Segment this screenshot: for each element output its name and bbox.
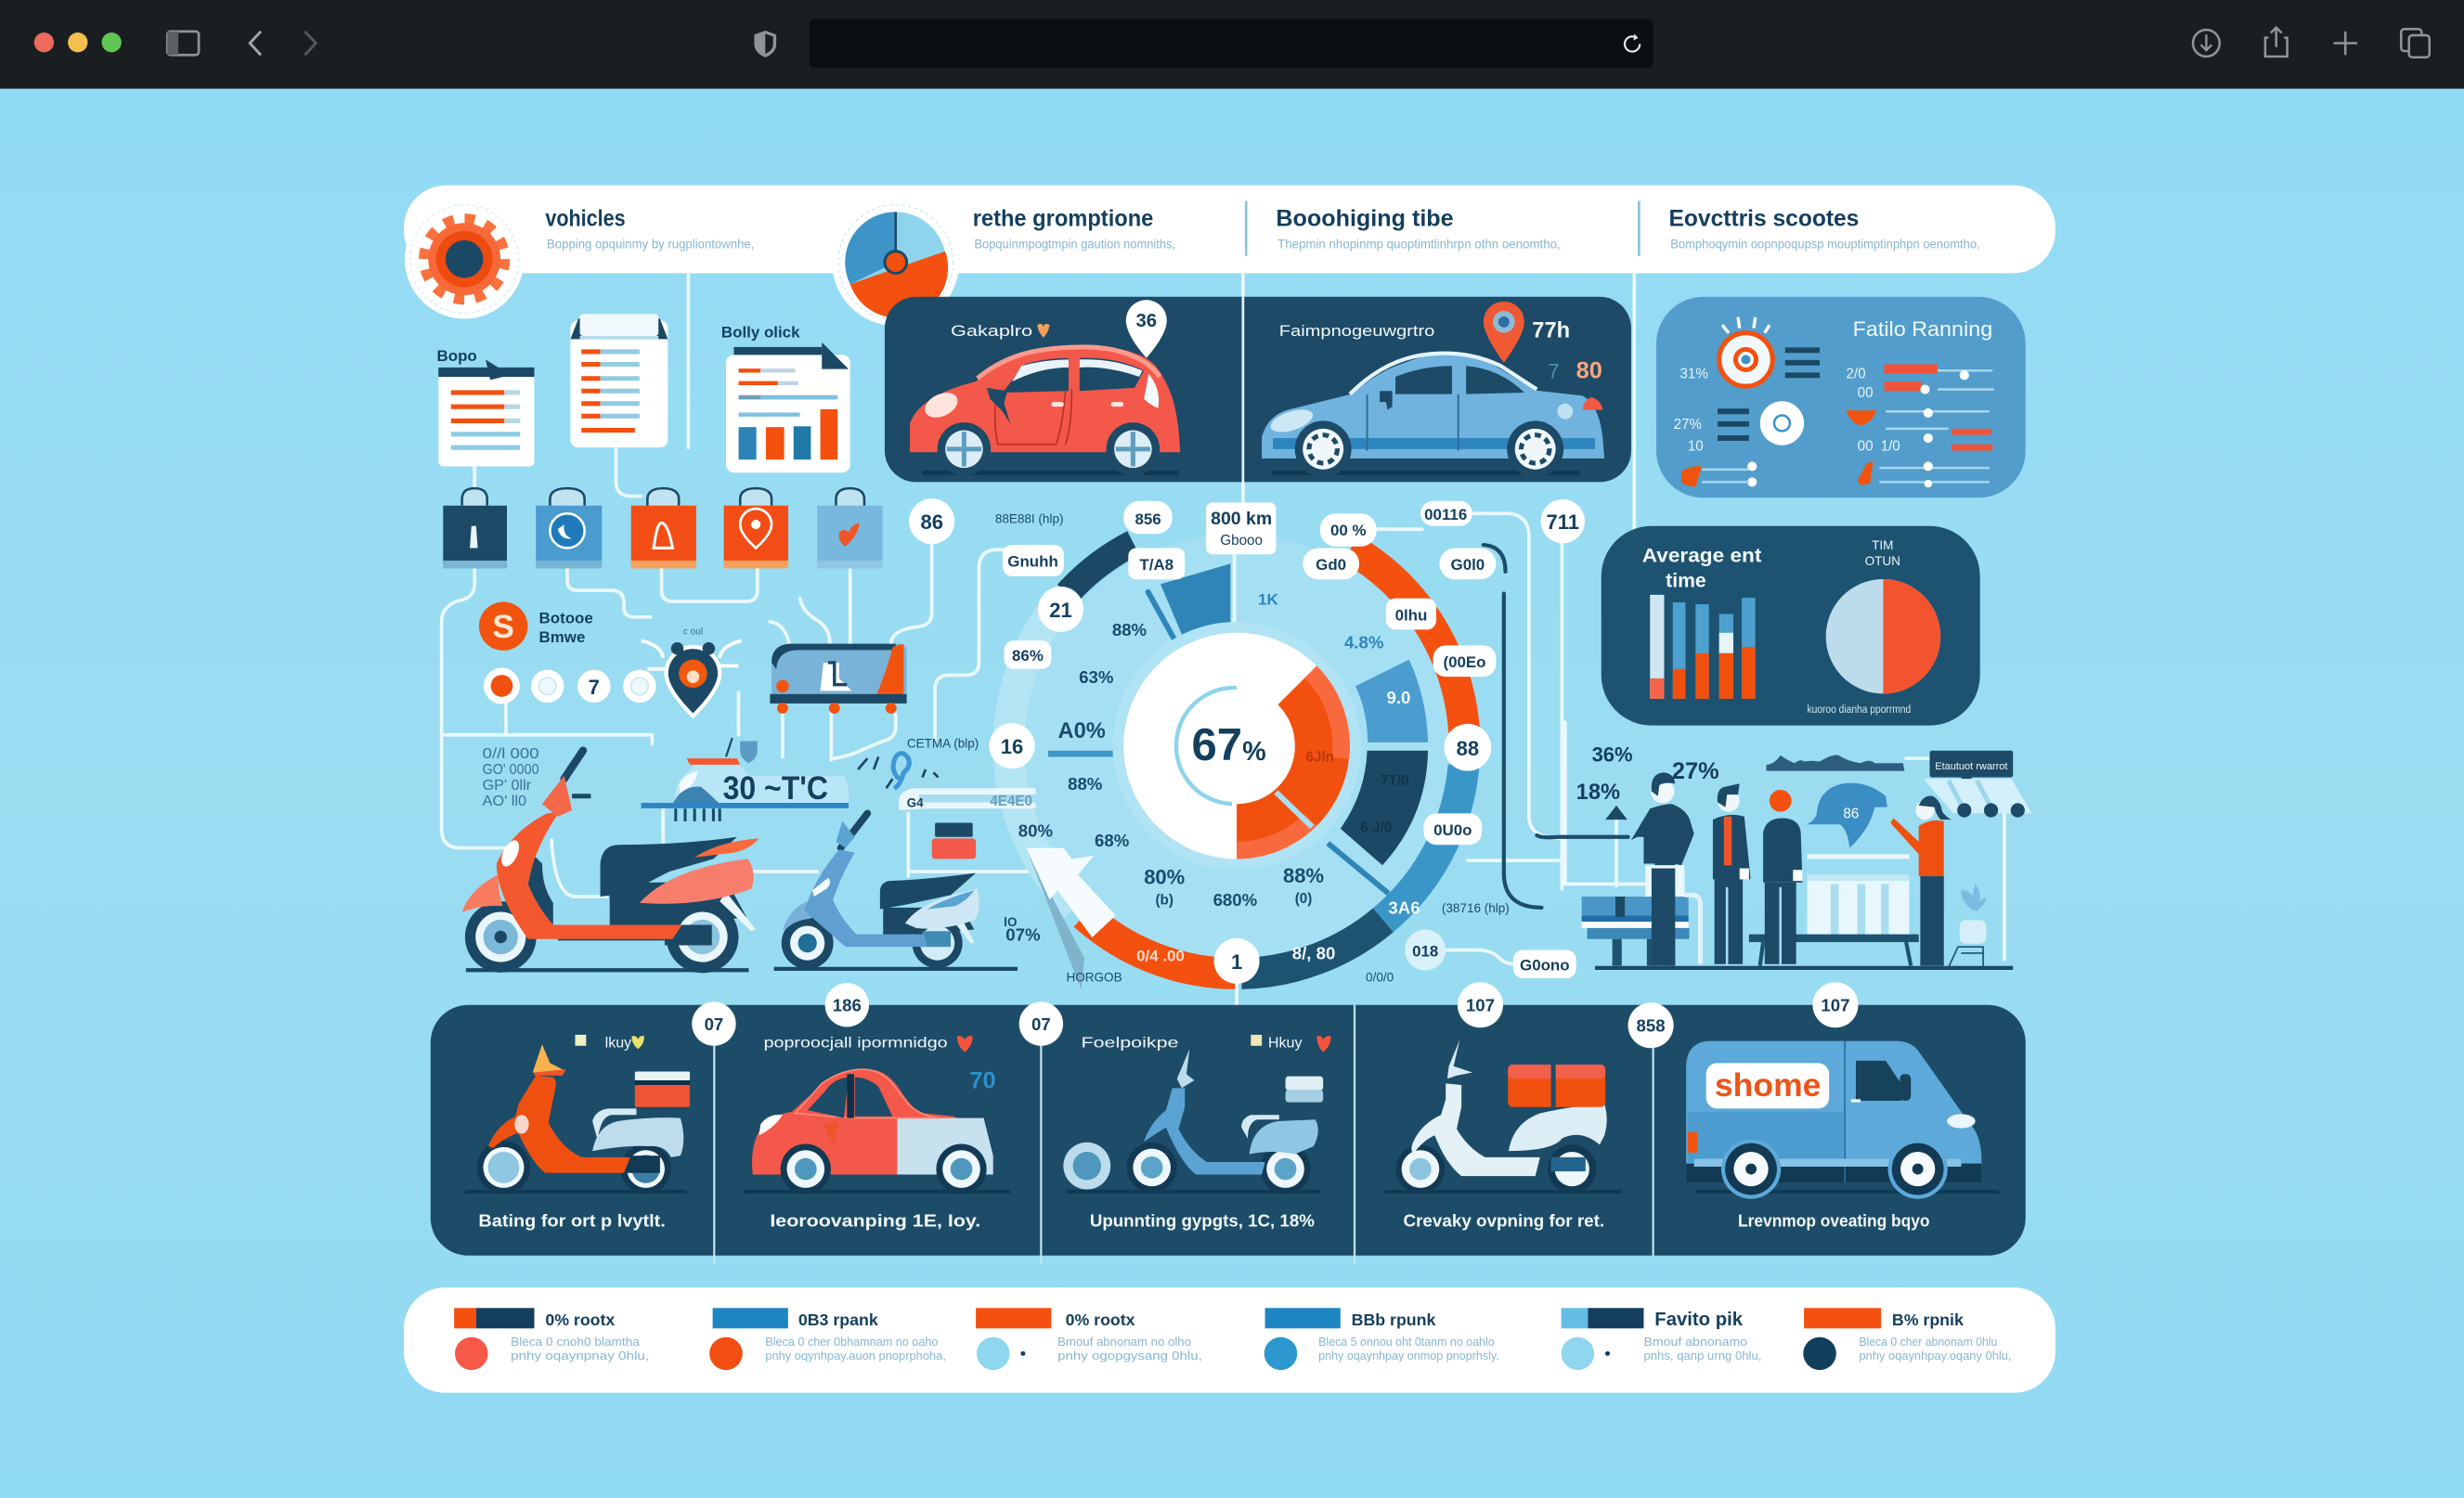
heading: vehicles: vohicles xyxy=(545,207,626,232)
legend item 3: pnhy ogopgysang 0hlu, xyxy=(1057,1349,1202,1362)
person 1 xyxy=(1631,772,1694,965)
donut percentage labels: 68% xyxy=(1095,831,1130,850)
bench left xyxy=(1582,895,1700,965)
bag: orange bell xyxy=(631,488,696,568)
node 86 xyxy=(909,498,954,544)
white center xyxy=(1123,633,1350,859)
document 1: Bopo xyxy=(437,347,477,365)
percent labels: 18% xyxy=(1576,781,1620,805)
donut percentage labels: 8/, 80 xyxy=(1292,944,1335,963)
red top box xyxy=(932,823,976,859)
speech bubble xyxy=(1807,783,1887,848)
document 3 chart page: Bolly olick xyxy=(721,324,800,342)
node 107 second xyxy=(1812,982,1859,1027)
blue scooter card: Upunnting gypgts, 1C, 18% xyxy=(1090,1210,1315,1230)
legend item 6: Bleca 0 cher abnonam 0hlu xyxy=(1859,1336,1997,1349)
average time panel xyxy=(1602,526,1980,726)
heading: electric scooters xyxy=(1669,207,1980,251)
legend item 1: 0% rootx xyxy=(545,1311,615,1329)
panel title xyxy=(1642,546,1761,592)
bag: dark xyxy=(443,488,507,568)
car card: 70 xyxy=(969,1067,996,1093)
left note box text: GO' 0000 xyxy=(483,762,539,778)
pill 86 percent: 86% xyxy=(1012,647,1044,665)
legend item 3: Bmouf abnonam no olho xyxy=(1057,1336,1191,1349)
pill 018 xyxy=(1405,930,1446,971)
ground xyxy=(466,969,749,971)
speech bubble: 86 xyxy=(1843,806,1859,821)
dark sector xyxy=(1341,751,1428,865)
legend item 5: Bmouf abnonamo xyxy=(1643,1336,1747,1349)
bottom vehicle panel xyxy=(431,982,2026,1264)
legend item 6: pnhy oqaynhpay.oqany 0hlu, xyxy=(1859,1349,2012,1362)
icon: location pin with rays: c oul xyxy=(683,626,703,637)
sliders xyxy=(1681,365,1994,487)
pill 800 km: Gbooo xyxy=(1220,533,1263,549)
blue car label: Faimpnogeuwgrtro xyxy=(1279,322,1434,340)
left note box text xyxy=(483,746,539,809)
status dots: 7 xyxy=(589,676,600,699)
node 85: 858 xyxy=(1637,1016,1666,1036)
plant xyxy=(1949,884,1986,967)
pill G0 l0: G0l0 xyxy=(1451,556,1485,574)
rear shell xyxy=(640,859,754,904)
node 186: 186 xyxy=(833,996,862,1015)
donut callout pills xyxy=(899,501,1576,978)
gauge icon xyxy=(1719,317,1772,386)
blue car xyxy=(1262,354,1604,477)
left note box text: 0//l 000 xyxy=(483,746,539,762)
wheels xyxy=(465,901,537,973)
shopping bags xyxy=(443,488,883,568)
small values: 00 xyxy=(1858,385,1874,401)
display stand xyxy=(1749,854,1919,965)
pill 0lhu xyxy=(1386,599,1436,629)
body xyxy=(528,856,553,924)
donut percentage labels: 0/0/0 xyxy=(1366,970,1394,984)
document 3 chart page xyxy=(721,324,850,472)
value 80 xyxy=(1548,358,1602,384)
icon: vehicle seat xyxy=(770,644,907,714)
heading: promotions: rethe gromptione xyxy=(973,207,1153,232)
blue scooter xyxy=(774,813,1018,969)
pill T/A8: T/A8 xyxy=(1139,556,1174,574)
heading: promotions: Bopquinmpogtmpin gaution nomniths, xyxy=(974,237,1175,251)
donut percentage labels: 88% xyxy=(1112,620,1148,639)
tag speech box: Etautuot rwarrot xyxy=(1935,761,2007,772)
node 15 xyxy=(989,723,1035,768)
legend item 3: 0% rootx xyxy=(1066,1311,1135,1329)
header panel xyxy=(404,186,2055,273)
pill 0lhu: 0lhu xyxy=(1395,606,1427,624)
car panel divider xyxy=(1242,297,1244,482)
person 3 xyxy=(1763,790,1802,965)
pill G0ono xyxy=(1513,950,1576,978)
donut percentage labels: 88E88I (hlp) xyxy=(995,511,1063,525)
pill G0 l0 xyxy=(1439,548,1496,579)
icon: orange S badge with label: S xyxy=(492,608,514,645)
value 77h: 77h xyxy=(1532,319,1570,343)
small values: 10 xyxy=(1688,439,1704,455)
panel title: Average ent xyxy=(1642,546,1761,567)
donut percentage labels: 80% xyxy=(1144,866,1185,888)
small header: TIM xyxy=(1872,538,1893,552)
value 80: 7 xyxy=(1548,360,1559,383)
legend item 5 xyxy=(1562,1308,1761,1370)
node 21: 21 xyxy=(1049,599,1072,622)
seat xyxy=(601,837,737,897)
ratio panel xyxy=(1656,297,2026,497)
document 1 xyxy=(437,347,534,466)
heading: electric scooters: Bomphoqymin oopnpoqupsp mouptimptinphpn oenomtho, xyxy=(1670,237,1980,251)
30 degree panel xyxy=(642,738,849,821)
icon: orange S badge with label: Bmwe xyxy=(539,628,585,646)
legend item 1 xyxy=(454,1308,649,1370)
donut percentage labels: 1K xyxy=(1258,590,1279,608)
node 86: 86 xyxy=(920,510,943,534)
percent labels: 27% xyxy=(1672,758,1719,784)
pill G0ono: G0ono xyxy=(1520,957,1570,975)
arrowhead xyxy=(1605,806,1628,820)
value 80: 80 xyxy=(1576,358,1602,384)
connector lines xyxy=(442,273,2004,1005)
panel dividers xyxy=(714,1005,1653,1264)
pill G4: G4 xyxy=(907,796,924,810)
heading: promotions xyxy=(973,207,1175,251)
ground xyxy=(1595,967,2013,969)
pill Gnuhh xyxy=(1003,545,1064,576)
donut percentage labels: 63% xyxy=(1079,667,1114,687)
pill 00116 xyxy=(1420,501,1472,526)
red car panel xyxy=(885,297,1631,482)
icon: gear xyxy=(405,200,524,318)
small header: OTUN xyxy=(1865,554,1900,568)
icon: location pin with rays xyxy=(642,626,742,716)
donut percentage labels: 3A6 xyxy=(1388,898,1420,918)
orange pin xyxy=(1484,302,1524,363)
legend item 4 xyxy=(1264,1308,1499,1370)
pill 856 xyxy=(1123,501,1173,534)
pill 0U0o: 0U0o xyxy=(1433,821,1472,839)
legend item 5: pnhs, qanp urng 0hlu, xyxy=(1643,1349,1761,1362)
icon: orange S badge with label xyxy=(479,601,593,651)
donut percentage labels: 6 J/0 xyxy=(1360,820,1392,836)
left note box text: AO' ll0 xyxy=(483,794,526,809)
node 88: 88 xyxy=(1457,737,1479,760)
node 85 xyxy=(1628,1002,1674,1048)
legend item 2: pnhy oqynhpay.auon pnoprphoha, xyxy=(765,1349,946,1362)
legend item 6: B% rpnik xyxy=(1892,1311,1964,1329)
panel title: Fatilo Ranning xyxy=(1853,317,1992,341)
icon: heart xyxy=(1037,324,1050,338)
legend item 2: 0B3 rpank xyxy=(798,1311,878,1329)
center value: 67% xyxy=(1192,720,1266,770)
node 88 xyxy=(1445,724,1491,771)
node 107 second: 107 xyxy=(1821,996,1849,1015)
blue scooter card: Hkuy xyxy=(1268,1034,1303,1051)
pill 800 km: 800 km xyxy=(1211,509,1272,529)
donut percentage labels: 80% xyxy=(1018,821,1054,841)
bag: orange pin xyxy=(724,488,788,568)
legend item 6 xyxy=(1803,1308,2012,1370)
heading: vehicles: Bopping opquinmy by rugpliontownhe, xyxy=(547,237,754,251)
chassis xyxy=(558,883,746,940)
white pin 36 xyxy=(1126,300,1167,358)
scooter 1 card: lkuy xyxy=(605,1034,631,1051)
donut percentage labels: 9.0 xyxy=(1386,688,1410,707)
heading: booking time xyxy=(1276,207,1561,251)
white arrow pointer xyxy=(1026,848,1116,989)
pill Gnuhh: Gnuhh xyxy=(1007,553,1058,571)
bag: blue xyxy=(536,488,602,568)
node 1 xyxy=(1214,938,1260,984)
van card xyxy=(1686,1041,1999,1230)
small header xyxy=(1865,538,1900,568)
person 2 xyxy=(1713,783,1751,965)
donut callout nodes xyxy=(909,498,1585,984)
legend item 1: Bleca 0 cnoh0 blamtha xyxy=(511,1336,641,1349)
people scene xyxy=(1576,743,2032,968)
legend item 5: Favito pik xyxy=(1654,1310,1744,1330)
center disc halo xyxy=(1112,622,1361,870)
pill G4 xyxy=(899,788,1035,810)
browser toolbar xyxy=(0,0,2464,89)
donut percentage labels: 680% xyxy=(1213,890,1258,910)
panel title: time xyxy=(1666,571,1706,592)
small values: 31% xyxy=(1679,367,1708,382)
left note box text: GP' 0llr xyxy=(483,778,531,794)
tag speech box xyxy=(1904,751,2013,787)
landscape strip xyxy=(1766,755,1904,771)
pill 018: 018 xyxy=(1412,942,1438,960)
legend item 4: BBb rpunk xyxy=(1352,1311,1436,1329)
heading: booking time: Thepmin nhopinmp quoptimtlinhrpn othn oenomtho, xyxy=(1277,237,1561,251)
pill Gdo xyxy=(1303,548,1359,579)
bottom legend panel xyxy=(404,1287,2055,1393)
node 07: 07 xyxy=(705,1014,723,1034)
donut percentage labels: 88% xyxy=(1283,864,1324,887)
pill Gdo: Gd0 xyxy=(1316,556,1346,574)
pill G4: 4E4E0 xyxy=(990,794,1032,809)
node 07 second xyxy=(1019,1001,1063,1046)
donut percentage labels: CETMA (blp) xyxy=(907,736,979,750)
percent labels: 36% xyxy=(1592,743,1633,767)
node 07 second: 07 xyxy=(1031,1014,1051,1034)
small values: 2/0 xyxy=(1846,367,1866,382)
bag: light blue heart xyxy=(817,488,883,568)
donut percentage labels: (b) xyxy=(1155,892,1174,908)
donut percentage labels: 88% xyxy=(1068,774,1103,794)
node 07 xyxy=(692,1001,736,1046)
legend item 2: Bleca 0 cher 0bhamnam no oaho xyxy=(765,1336,938,1349)
pill 856: 856 xyxy=(1135,510,1161,528)
30 degree panel: 30 ~T'C xyxy=(723,769,828,807)
node 71: 711 xyxy=(1547,510,1579,534)
node 186 xyxy=(825,983,869,1027)
caption: kuoroo dianha pporrmnd xyxy=(1807,703,1911,716)
pill 00 percent: 00 % xyxy=(1330,522,1367,539)
scooter 1 card xyxy=(465,1034,690,1230)
legend item 4: Bleca 5 onnou oht 0tanm no oahlo xyxy=(1318,1336,1495,1349)
small values: 00 xyxy=(1858,439,1874,455)
donut percentage labels: 07% xyxy=(1005,924,1041,944)
small values: 1/0 xyxy=(1881,439,1900,455)
thin inner arc xyxy=(1176,688,1237,804)
status dots xyxy=(484,668,656,704)
donut percentage labels xyxy=(907,511,1510,984)
white pin 36: 36 xyxy=(1135,311,1157,331)
donut percentage labels: 7T/0 xyxy=(1381,773,1408,789)
pill 00 percent xyxy=(1320,513,1377,547)
white ring icon xyxy=(1760,401,1804,446)
donut percentage labels: 0/4 .00 xyxy=(1136,947,1185,964)
heading: electric scooters: Eovcttris scootes xyxy=(1669,207,1859,232)
donut percentage labels: A0% xyxy=(1058,719,1106,743)
pill 800 km xyxy=(1206,502,1276,554)
legend item 3 xyxy=(976,1308,1202,1370)
legend item 1: pnhy oqaynpnay 0hlu, xyxy=(511,1349,649,1362)
pill 00116: 00116 xyxy=(1424,506,1467,523)
legend item 2 xyxy=(709,1308,946,1370)
blue scooter card: Foelpoikpe xyxy=(1082,1034,1179,1051)
dark connector lines xyxy=(1484,545,1628,908)
pill 00Eo xyxy=(1433,645,1496,677)
heading: vehicles xyxy=(545,207,754,251)
donut percentage labels: 4.8% xyxy=(1344,633,1384,652)
pie chart xyxy=(1826,579,1940,693)
car card: Ieoroovanping 1E, Ioy. xyxy=(770,1210,980,1230)
icon: orange S badge with label: Botooe xyxy=(539,610,593,627)
pill 86 percent xyxy=(1005,640,1051,669)
blue sector top left xyxy=(1161,563,1230,645)
white scooter card: Crevaky ovpning for ret. xyxy=(1403,1210,1604,1230)
stacked bars xyxy=(1718,350,1820,438)
red scooter xyxy=(462,751,759,973)
ring segments xyxy=(1009,543,1465,974)
small values: 27% xyxy=(1674,417,1702,433)
red car xyxy=(910,346,1180,476)
heading: booking time: Booohiging tibe xyxy=(1276,207,1454,232)
numbered nodes xyxy=(692,982,1859,1048)
donut percentage labels: lO xyxy=(1004,915,1017,929)
small values xyxy=(1674,367,1900,455)
node 107 xyxy=(1458,982,1503,1027)
awning xyxy=(1924,779,2032,818)
head xyxy=(542,776,572,817)
bar chart xyxy=(1650,595,1756,699)
pill 0U0o xyxy=(1423,813,1482,845)
scooter 1 card: Bating for ort p lvytlt. xyxy=(478,1210,666,1230)
document 2 xyxy=(570,314,668,447)
blue scooter card xyxy=(1063,1034,1331,1230)
node 15: 16 xyxy=(1001,735,1023,758)
donut percentage labels: HORGOB xyxy=(1067,970,1122,984)
node 71 xyxy=(1541,499,1585,543)
donut percentage labels: (38716 (hlp) xyxy=(1442,901,1510,915)
red car label: Gakaplro xyxy=(951,322,1032,340)
blue sector right xyxy=(1355,660,1428,743)
icon: pie gauge xyxy=(832,199,959,326)
car card: poproocjall ipormnidgo xyxy=(764,1034,948,1051)
donut percentage labels: (0) xyxy=(1295,891,1312,907)
white scooter card xyxy=(1384,1040,1622,1230)
van card: shome xyxy=(1715,1066,1821,1104)
orange sector xyxy=(1237,666,1350,859)
node 107: 107 xyxy=(1466,996,1495,1015)
percent labels xyxy=(1576,743,1719,805)
car card xyxy=(744,1034,1010,1230)
donut chart xyxy=(1009,534,1465,974)
icon: music sound marks xyxy=(858,754,938,788)
inner disc xyxy=(1025,534,1449,958)
person 4 xyxy=(1890,796,1952,965)
legend item 4: pnhy oqaynhpay onmop pnoprhsly. xyxy=(1318,1349,1499,1362)
node 1: 1 xyxy=(1231,950,1242,974)
header dividers xyxy=(1246,201,1639,256)
donut percentage labels: 6Jln xyxy=(1306,750,1334,766)
van card: Lrevnmop oveating bqyo xyxy=(1738,1210,1930,1230)
pill 00Eo: (00Eo xyxy=(1443,653,1486,671)
node 21 xyxy=(1038,587,1083,632)
pill T/A8 xyxy=(1128,548,1185,579)
